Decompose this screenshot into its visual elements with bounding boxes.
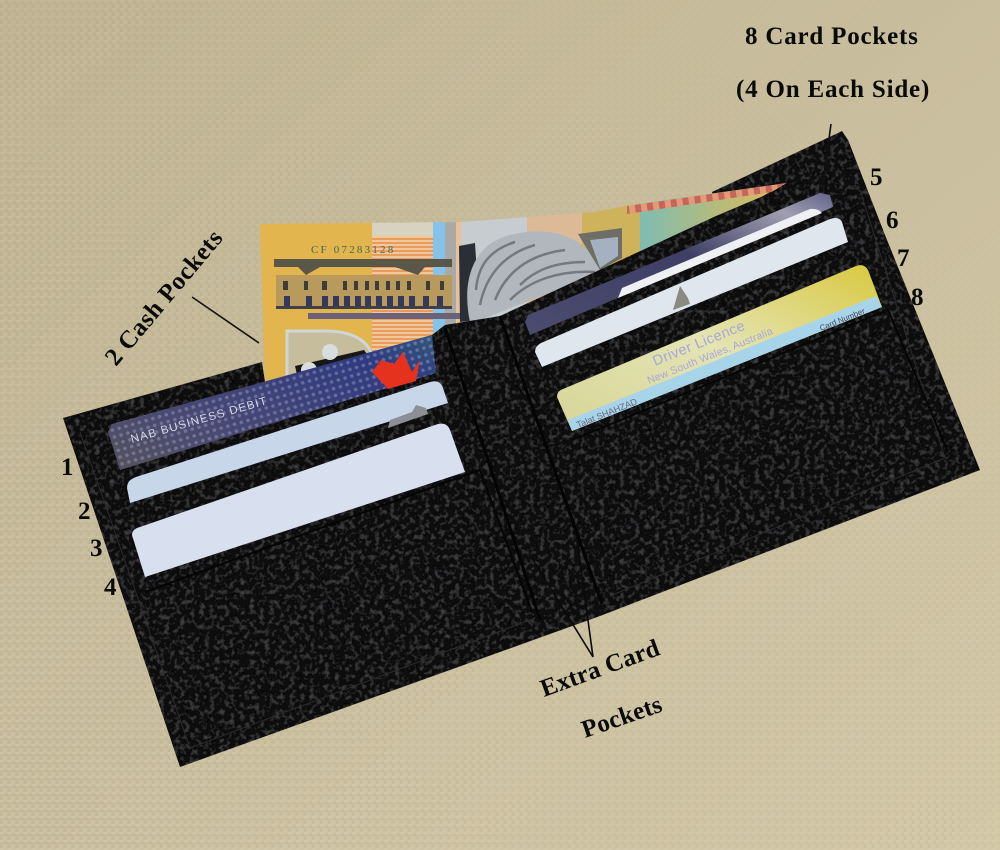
note: stars xyxy=(295,350,366,373)
licence number label: Card Number xyxy=(818,306,867,333)
right wallet panel xyxy=(525,193,882,431)
pocket numbers left xyxy=(61,454,117,601)
licence name: Talat SHAHZAD xyxy=(575,396,639,430)
label: 2 cash pockets: 2 Cash Pockets xyxy=(100,225,229,371)
note: grey panel xyxy=(578,228,622,270)
label: 8 card pockets: (4 On Each Side) xyxy=(736,76,930,103)
label: extra card pockets: Extra Card xyxy=(537,635,663,703)
card pocket 3: white card xyxy=(132,424,465,577)
wallet stitch and fold lines xyxy=(80,190,948,748)
note: red striped top edge xyxy=(627,183,787,214)
wallet back edge xyxy=(712,131,883,240)
tree motif xyxy=(673,286,690,310)
wallet body xyxy=(63,140,980,767)
card pocket 1: NAB debit card xyxy=(108,335,436,470)
pocket numbers left: 2 xyxy=(78,498,90,525)
note: lower-left clear window xyxy=(286,330,372,376)
pocket numbers left: 4 xyxy=(104,574,117,601)
pocket numbers left: 1 xyxy=(61,454,74,481)
card pocket 7: white card xyxy=(535,218,848,367)
card pocket 2: white card xyxy=(127,381,448,503)
label: 8 card pockets: 8 Card Pockets xyxy=(745,23,919,50)
pocket numbers left: 3 xyxy=(90,535,102,562)
note: building illustration xyxy=(274,259,468,319)
pocket numbers right: 8 xyxy=(911,284,924,311)
note: teal window xyxy=(640,183,785,252)
card pocket 5: holographic card xyxy=(525,193,833,335)
note: serial number: CF 07283128 xyxy=(311,244,395,256)
note: yellow left panel xyxy=(258,220,374,390)
card pocket 8: driver licence xyxy=(557,265,882,431)
pocket numbers right: 5 xyxy=(870,164,882,191)
note: blue security strip xyxy=(433,220,445,340)
banknote xyxy=(258,180,790,390)
note: orange striped panel xyxy=(372,236,433,352)
licence heading: Driver Licence xyxy=(651,318,748,370)
card logo: red star xyxy=(372,352,420,389)
pocket numbers right xyxy=(870,164,924,311)
left wallet panel xyxy=(108,335,465,577)
label: extra card pockets: Pockets xyxy=(578,691,666,744)
pocket numbers right: 6 xyxy=(886,207,898,234)
licence subheading: New South Wales, Australia xyxy=(646,325,775,387)
card text: NAB BUSINESS DEBIT xyxy=(130,395,269,446)
card pocket 6: white card xyxy=(618,209,822,298)
note: portrait hair xyxy=(459,231,602,322)
note: silver panel xyxy=(461,217,527,322)
label: 8 card pockets xyxy=(736,23,930,190)
pocket numbers right: 7 xyxy=(897,245,910,272)
label: extra card pockets xyxy=(530,540,666,744)
